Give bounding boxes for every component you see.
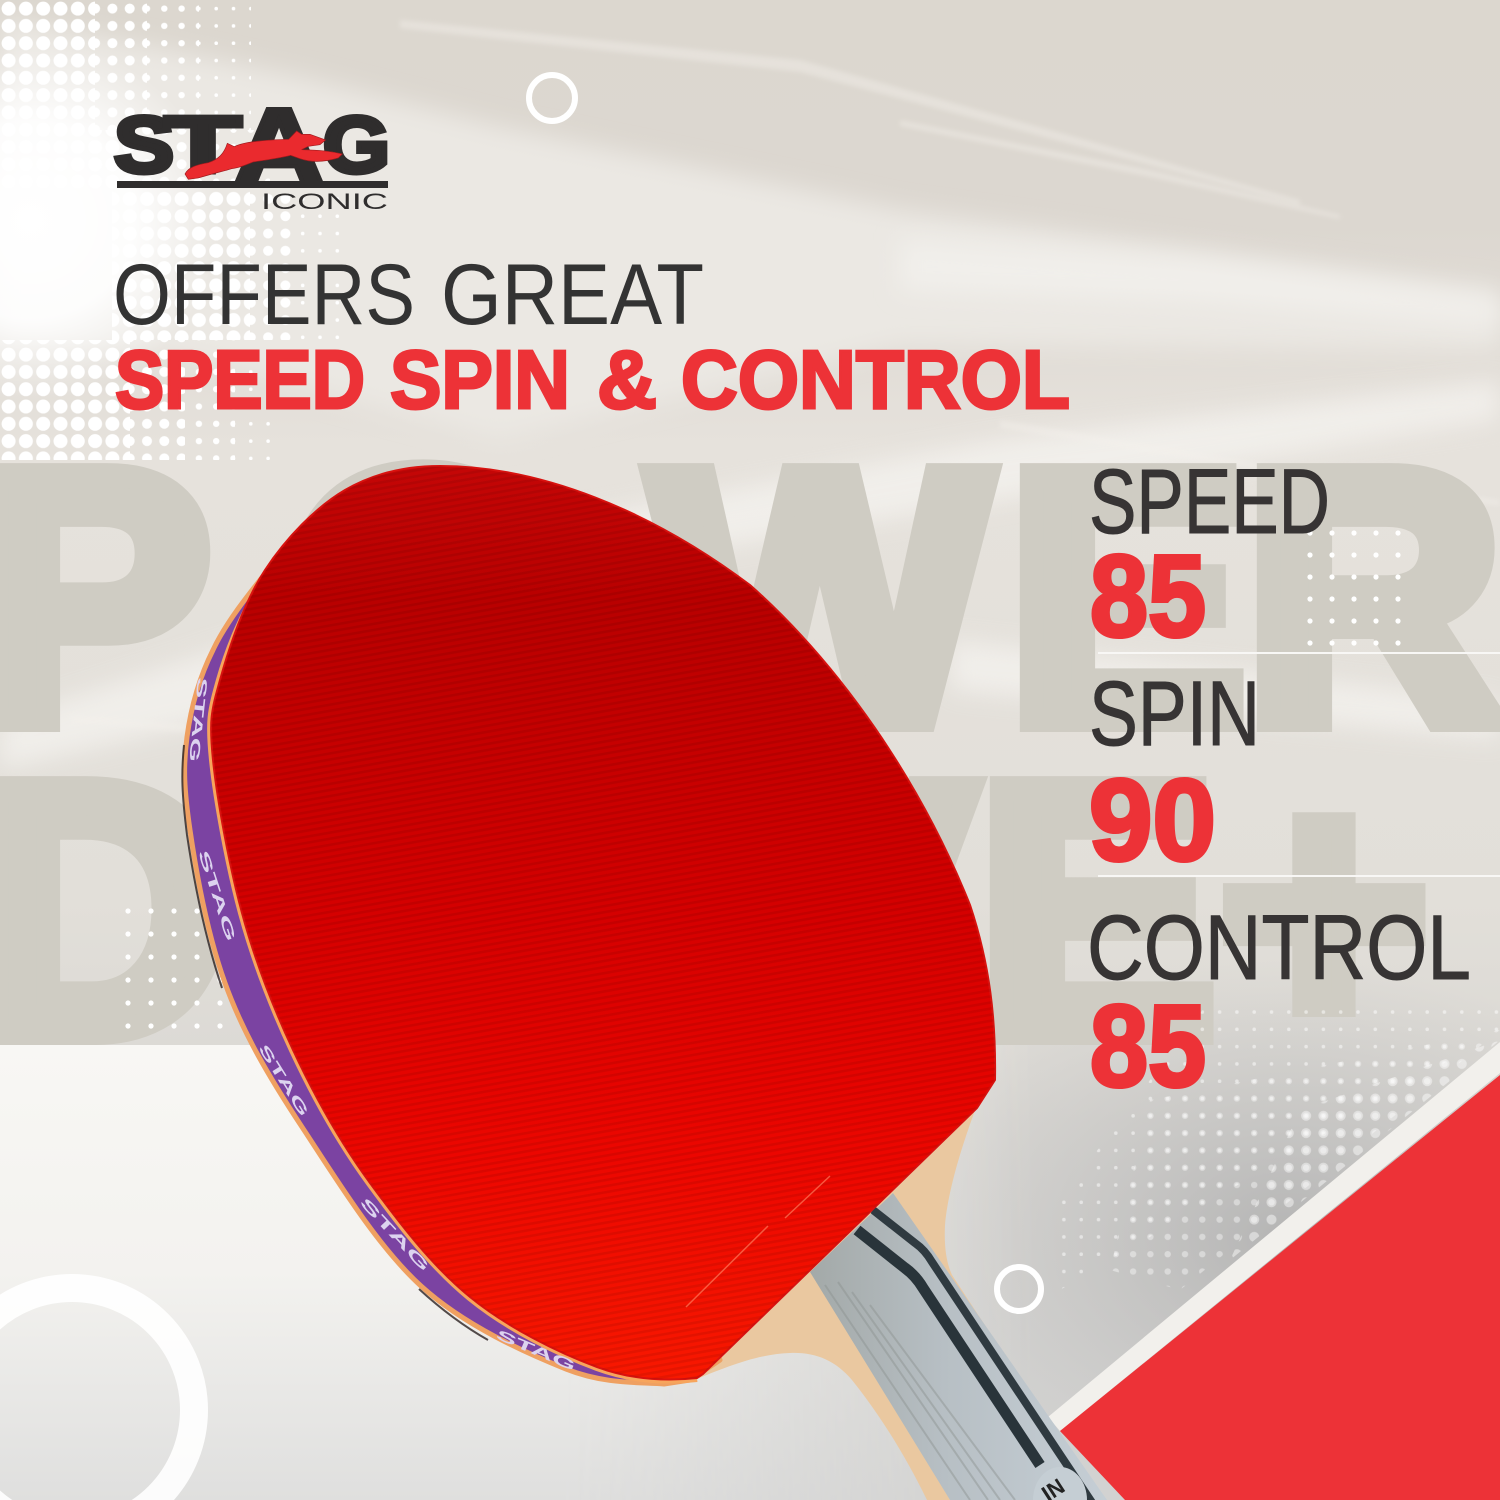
paddle: red rubber xyxy=(211,466,995,1380)
heading line 2 xyxy=(115,333,1070,426)
logo: Stag Iconic: A xyxy=(232,85,326,210)
halftone dots: top left xyxy=(0,0,345,460)
stat: spin: SPIN xyxy=(1089,663,1260,765)
paddle: purple rubber sheet edge with orange rim xyxy=(185,570,720,1384)
heading line 2: CONTROL xyxy=(681,333,1070,426)
watermark word: DRIVE+: DRIVE+ xyxy=(0,712,1428,1109)
paddle: brand marks on purple edge xyxy=(186,677,579,1374)
paddle: grey grip xyxy=(810,1193,1107,1500)
paddle: brand marks on purple edge: STAG xyxy=(186,677,211,763)
heading line 2: SPEED xyxy=(115,333,365,426)
heading line 2: & xyxy=(597,333,657,426)
paddle: wooden blade and handle flare xyxy=(690,1105,1100,1500)
paddle: brand marks on purple edge: STAG xyxy=(357,1194,433,1275)
halftone dots: bottom right xyxy=(1060,1000,1500,1290)
halftone dots: right of paddle xyxy=(1299,522,1409,654)
heading line 1: GREAT xyxy=(441,247,704,343)
paddle: dark shadow edge on rim xyxy=(182,745,222,988)
stat: spin: 90 xyxy=(1089,755,1216,885)
paddle: grip badge xyxy=(1033,1467,1087,1500)
heading line 1 xyxy=(113,247,704,343)
icon: leaping red stag xyxy=(185,131,342,179)
decorative ring: large bottom left xyxy=(0,1288,194,1500)
stat: speed xyxy=(1089,451,1330,661)
stat: control: 85 xyxy=(1090,981,1206,1111)
decorative ring: top xyxy=(529,75,575,121)
paddle: inner dark stripe xyxy=(857,1230,1040,1465)
logo: Stag Iconic: G xyxy=(323,100,390,189)
paddle: grip grain lines xyxy=(825,1282,1015,1500)
logo: Stag Iconic xyxy=(114,85,390,214)
stat: control xyxy=(1087,897,1471,1111)
watermark word: POWER: POWER xyxy=(0,399,1500,796)
logo: Stag Iconic: S xyxy=(114,100,174,189)
logo: Stag Iconic: T xyxy=(165,100,241,189)
paddle: inner orange edge xyxy=(211,585,697,1380)
logo: Stag Iconic: ICONIC xyxy=(261,189,388,214)
halftone dots: lower left xyxy=(117,900,232,1038)
paddle: brand marks on purple edge: STAG xyxy=(255,1041,313,1119)
stat: speed: 85 xyxy=(1090,531,1206,661)
stat: spin xyxy=(1089,663,1260,885)
paddle: outer dark stripe xyxy=(873,1210,1097,1500)
paddle: lower dark shadow edge xyxy=(419,1289,488,1340)
decorative ring: lower right xyxy=(997,1267,1041,1311)
paddle: rubber pimple texture xyxy=(211,466,995,1380)
paddle: scratches on rubber xyxy=(686,1176,830,1307)
stat: speed: SPEED xyxy=(1089,451,1330,553)
heading line 2: SPIN xyxy=(390,333,570,426)
heading line 1: OFFERS xyxy=(113,247,415,343)
table tennis paddle xyxy=(182,466,1107,1500)
red corner triangle with white band xyxy=(1048,1042,1500,1500)
paddle: brand marks on purple edge: STAG xyxy=(494,1326,579,1374)
paddle: brand marks on purple edge: STAG xyxy=(195,848,240,944)
